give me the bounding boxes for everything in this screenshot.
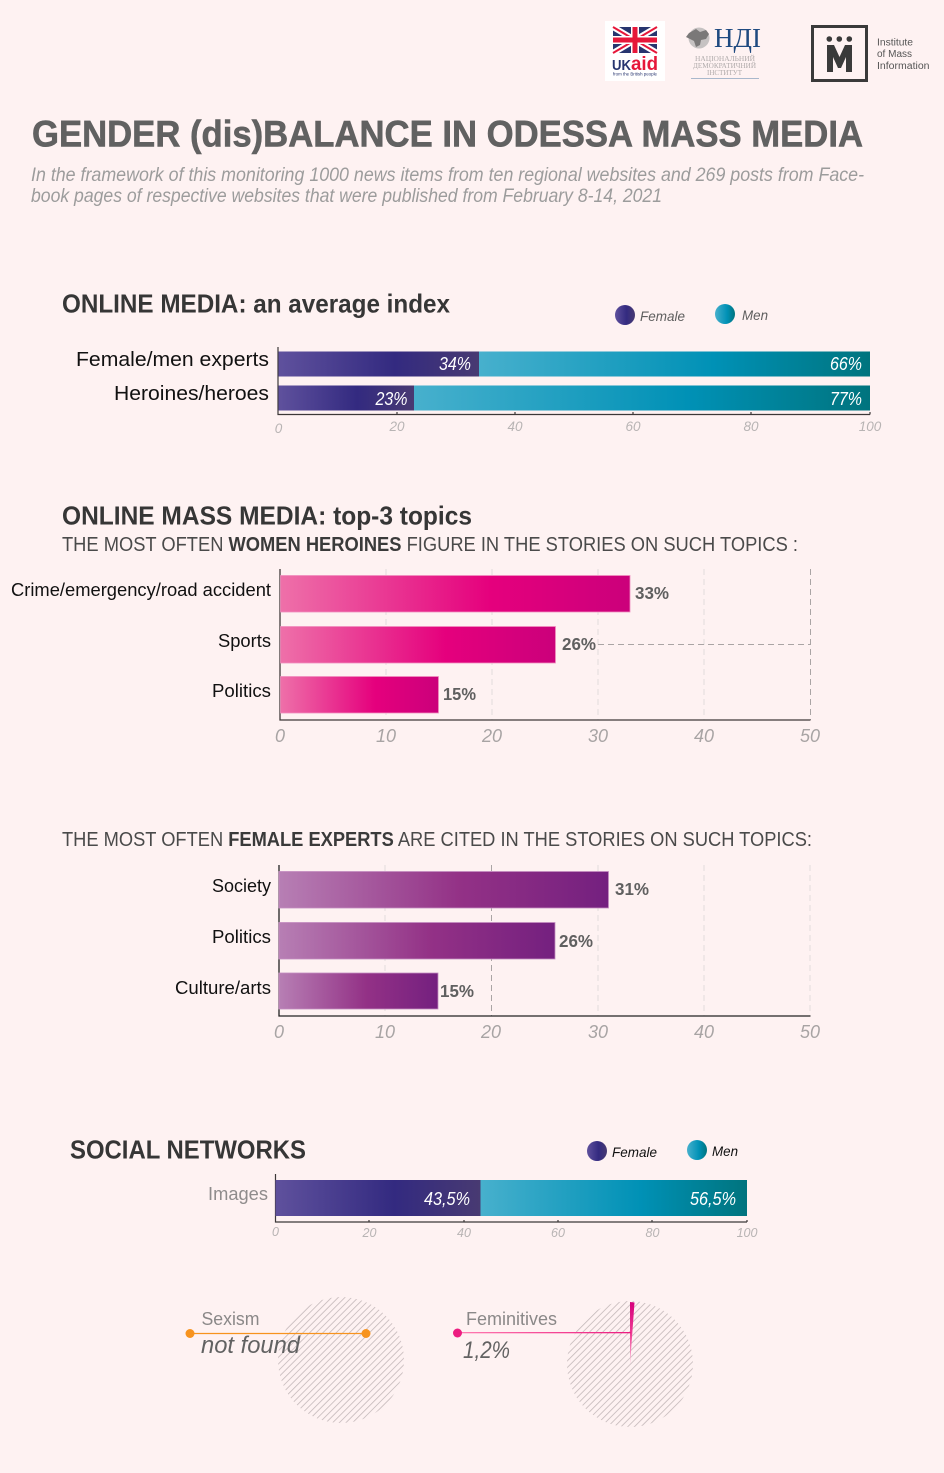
bar: society: 31% — [615, 879, 649, 899]
axis labels: 100 — [859, 419, 882, 434]
axis labels: 100 — [737, 1226, 757, 1240]
grid — [385, 865, 810, 1016]
bar: experts: 66% — [830, 354, 862, 374]
logo: NDI: ІНСТИТУТ — [707, 68, 742, 77]
legend: online media: Men — [742, 307, 768, 323]
logo: Institute of Mass Information: Institute — [877, 38, 913, 48]
intro text: In the framework of this monitoring 1000 news items from ten regional websites and 269 posts from Face- — [31, 165, 864, 186]
axis labels: 50 — [800, 726, 820, 746]
bar: experts: 34% — [439, 354, 471, 374]
logo: UK aid: UK — [612, 57, 631, 74]
axis labels — [275, 726, 820, 746]
category label: Images — [208, 1183, 268, 1204]
logo: NDI: НДІ — [714, 23, 761, 53]
bar: society — [212, 872, 649, 908]
bar: culture: 15% — [440, 981, 474, 1001]
heading: top-3 topics: ONLINE MASS MEDIA: top-3 topics — [62, 500, 472, 530]
heading: social networks: SOCIAL NETWORKS — [70, 1134, 306, 1164]
title: GENDER (dis)BALANCE IN ODESSA MASS MEDIA — [32, 114, 863, 154]
bar: crime: 33% — [635, 583, 669, 603]
legend: social networks — [587, 1140, 738, 1161]
axis labels: 40 — [694, 1022, 714, 1042]
chart: women heroines topics — [11, 569, 820, 746]
bar: politics: 15% — [443, 684, 476, 704]
axis labels: 40 — [694, 726, 714, 746]
bar: society: Society — [212, 875, 272, 896]
bar: sports: Sports — [218, 630, 271, 651]
intro text: book pages of respective websites that were published from February 8-14, 2021 — [31, 186, 662, 207]
pie: feminitives: Feminitives — [466, 1308, 557, 1329]
bar: heroines: 23% — [375, 389, 408, 409]
logo: UK aid: from the British people — [613, 72, 657, 76]
pie: sexism: Sexism — [202, 1308, 260, 1329]
bar: images — [276, 1180, 747, 1216]
bar: crime — [11, 576, 669, 612]
axis labels: 10 — [376, 726, 396, 746]
axis labels: 80 — [646, 1226, 659, 1240]
axis labels: 60 — [625, 419, 641, 434]
pie: sexism — [186, 1297, 404, 1423]
axis labels: 10 — [375, 1022, 395, 1042]
logo: NDI: ДЕМОКРАТИЧНИЙ — [693, 61, 757, 70]
legend: social networks: Female — [612, 1144, 657, 1160]
axis labels: 50 — [800, 1022, 820, 1042]
category labels — [76, 348, 269, 405]
category labels: Heroines/heroes — [114, 382, 269, 405]
chart: online media average index — [76, 347, 882, 436]
category labels: Female/men experts — [76, 348, 269, 371]
axis labels: 30 — [588, 726, 608, 746]
axis labels — [272, 1225, 757, 1240]
bar: politics: 26% — [559, 931, 593, 951]
axis labels: 20 — [480, 1022, 501, 1042]
axis — [276, 1174, 747, 1222]
bar: experts — [278, 352, 870, 376]
bar: culture: Culture/arts — [175, 977, 271, 998]
legend: social networks: Men — [712, 1143, 738, 1159]
subheading: women heroines: THE MOST OFTEN WOMEN HEROINES FIGURE IN THE STORIES ON SUCH TOPICS : — [62, 534, 798, 556]
axis labels: 40 — [457, 1226, 471, 1240]
bar: heroines — [278, 386, 870, 410]
axis labels: 60 — [551, 1226, 565, 1240]
legend: online media — [615, 304, 768, 325]
axis labels: 0 — [275, 726, 285, 746]
axis labels: 0 — [275, 421, 283, 436]
pie: feminitives: 1,2% — [463, 1337, 510, 1364]
grid — [386, 569, 704, 720]
bar: politics — [212, 922, 593, 959]
bar: crime: Crime/emergency/road accident — [11, 579, 271, 600]
axis labels: 80 — [743, 419, 759, 434]
axis labels: 20 — [388, 419, 405, 434]
logo: NDI — [686, 23, 761, 79]
legend: online media: Female — [640, 308, 685, 324]
bar: heroines: 77% — [830, 389, 862, 409]
bar: politics: Politics — [212, 680, 271, 701]
axis labels: 20 — [481, 726, 502, 746]
axis labels: 40 — [507, 419, 523, 434]
bar: culture — [175, 973, 474, 1009]
bar: politics: Politics — [212, 926, 271, 947]
axis — [278, 347, 870, 414]
axis labels — [274, 1022, 820, 1042]
axis — [279, 865, 810, 1016]
axis labels — [275, 419, 882, 436]
chart: female experts topics — [175, 865, 820, 1042]
pie: sexism: not found — [201, 1332, 301, 1359]
bar: sports — [218, 626, 596, 663]
bar: images: 43,5% — [424, 1189, 470, 1209]
heading: online media: ONLINE MEDIA: an average index — [62, 288, 450, 318]
chart: social networks images — [208, 1174, 757, 1240]
subheading: female experts: THE MOST OFTEN FEMALE EXPERTS ARE CITED IN THE STORIES ON SUCH TOPICS: — [62, 829, 812, 851]
logo: Institute of Mass Information — [812, 26, 930, 80]
pie: feminitives — [453, 1301, 693, 1427]
bar: sports: 26% — [562, 634, 596, 654]
axis labels: 20 — [362, 1226, 376, 1240]
logo: UK aid — [605, 21, 665, 81]
axis labels: 0 — [274, 1022, 284, 1042]
axis labels: 30 — [588, 1022, 608, 1042]
logo: Institute of Mass Information: of Mass — [877, 49, 912, 60]
logo: Institute of Mass Information: Information — [877, 61, 930, 72]
logo: UK aid: aid — [631, 54, 658, 75]
intro text — [31, 165, 864, 207]
axis labels: 0 — [272, 1225, 279, 1239]
logo: NDI: НАЦІОНАЛЬНИЙ — [695, 54, 756, 63]
bar: images: 56,5% — [690, 1189, 736, 1209]
axis — [280, 569, 810, 720]
bar: politics — [212, 676, 476, 713]
